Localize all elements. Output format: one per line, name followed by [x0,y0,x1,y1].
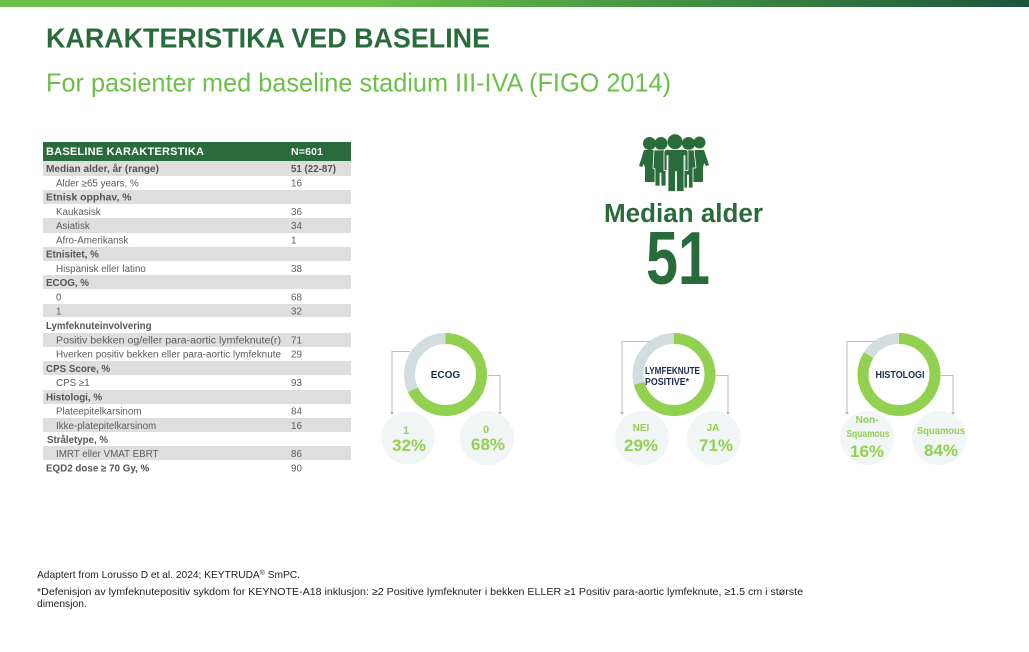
row: radiation type heading: Stråletype, % [47,435,108,446]
bubble: squamous [912,411,966,465]
label: histology: HISTOLOGI [876,370,925,381]
bubble: ECOG 1 [382,412,434,464]
row: positive nodes: 71 [291,336,302,346]
bubble: non-squamous: 16% [850,442,884,461]
footnote: definition: *Defenisjon av lymfeknutepositiv sykdom for KEYNOTE-A18 inklusjon: ≥2 Positive lymfeknuter i bekken ELLER ≥1 Positiv para-aortic lymfeknute, ≥1.5 cm i største [37,587,803,598]
bubble: ECOG 0: 68% [471,435,505,454]
label: lymph node positive: POSITIVE* [645,377,689,388]
bubble: squamous: Squamous [917,426,965,437]
row: ethnic origin heading: Etnisk opphav, % [46,192,132,204]
row: squamous [56,406,302,418]
row: Asian [43,218,351,233]
label: ECOG: ECOG [431,370,460,381]
row: CPS heading [43,361,351,375]
row: lymph node heading: Lymfeknuteinvolvering [46,321,152,332]
row: positive nodes: Positiv bekken og/eller para-aortic lymfeknute(r) [56,336,281,346]
footnote: source: Adaptert from Lorusso D et al. 2024; KEYTRUDA [37,570,262,581]
row: African American: Afro-Amerikansk [56,236,129,246]
donut chart: ECOG [410,338,482,410]
bubble: ECOG 0 [460,411,514,465]
row: age 65+: Alder ≥65 years, % [56,178,139,190]
footnote: definition: dimensjon. [37,599,87,610]
row: squamous: Plateepitelkarsinom [56,406,142,418]
row: Asian: 34 [291,221,302,232]
row: histology heading [43,390,351,404]
bubble: non-squamous: Non- [856,415,878,426]
row: Hispanic: Hispanisk eller latino [56,264,146,275]
footnote: source: ® [260,569,266,577]
table header [43,142,351,161]
number: 51: 51 [646,216,710,300]
row: non-squamous: 16 [291,421,302,432]
label: lymph node positive: LYMFEKNUTE [645,366,700,377]
bubble: no: 29% [624,436,658,455]
bubble: non-squamous: Squamous [846,429,890,440]
row: IMRT: IMRT eller VMAT EBRT [56,449,159,460]
bubble: non-squamous [840,411,894,465]
row: neither positive: 29 [291,350,302,360]
row: CPS 1+ [56,378,302,389]
row: IMRT: 86 [291,449,302,460]
row: IMRT [43,446,351,460]
panel: ECOG donut [382,338,514,465]
row: ethnicity heading: Etnisitet, % [46,250,99,260]
row: ECOG heading [43,275,351,289]
bubble: squamous: 84% [924,441,958,460]
title: KARAKTERISTIKA VED BASELINE [46,22,490,54]
connector arrows [845,342,955,415]
table header: N=601 [291,146,323,158]
donut chart: histology [863,338,935,410]
top gradient bar [0,0,1029,7]
row: Caucasian [56,207,302,218]
row: positive nodes [43,333,351,347]
row: ECOG 0 [56,292,302,304]
row: ECOG 1: 1 [56,306,61,318]
table header: BASELINE KARAKTERSTIKA [46,146,204,158]
row: non-squamous [43,418,351,432]
subtitle: For pasienter med baseline stadium III-IVA (FIGO 2014) [46,68,671,98]
row: African American: 1 [291,236,296,246]
row: median age: Median alder, år (range) [46,164,159,175]
row: ECOG 1 [43,304,351,318]
bubble: ECOG 0: 0 [483,424,489,436]
row: median age [43,161,351,176]
row: EQD2 dose: EQD2 dose ≥ 70 Gy, % [46,464,149,474]
donut chart: lymph node positive [638,338,710,410]
row: EQD2 dose: 90 [291,464,302,474]
row: ECOG heading: ECOG, % [46,278,89,289]
row: ECOG 0: 0 [56,292,62,304]
row: neither positive: Hverken positiv bekken eller para-aortic lymfeknute [56,350,282,360]
label: lymph node positive [645,366,700,388]
row: non-squamous: Ikke-platepitelkarsinom [56,421,156,432]
row: median age: 51 (22-87) [291,164,336,175]
bubble: no: NEI [633,423,650,434]
row: ethnic origin heading [43,190,351,204]
row: ECOG 0: 68 [291,292,302,304]
bubble: yes: 71% [699,436,733,455]
row: ECOG 1: 32 [291,306,302,318]
row: histology heading: Histologi, % [46,392,102,404]
row: EQD2 dose [46,464,302,474]
row: Caucasian: 36 [291,207,302,218]
bubble: no [615,411,669,465]
panel: lymph node donut [615,338,741,465]
panel: baseline characteristics table [43,142,351,474]
bubble: ECOG 1: 1 [403,425,409,437]
row: Caucasian: Kaukasisk [56,207,101,218]
row: age 65+ [56,178,302,190]
footnote: source: SmPC. [265,570,300,581]
row: Asian: Asiatisk [56,221,90,232]
connector arrows [390,352,502,415]
row: CPS heading: CPS Score, % [46,364,111,375]
row: African American [56,236,296,246]
icon: group of people [639,134,709,192]
row: Hispanic: 38 [291,264,302,275]
row: age 65+: 16 [291,178,302,190]
heading: median age: Median alder [604,200,763,228]
row: CPS 1+: CPS ≥1 [56,378,90,389]
row: ethnicity heading [43,247,351,261]
bubble: yes [687,411,741,465]
footnote: definition [37,587,803,610]
panel: histology donut [840,338,966,465]
row: CPS 1+: 93 [291,378,302,389]
bubble: yes: JA [707,423,719,434]
connector arrows [620,342,730,415]
row: squamous: 84 [291,406,302,418]
row: Hispanic [56,264,302,275]
bubble: ECOG 1: 32% [392,436,426,455]
